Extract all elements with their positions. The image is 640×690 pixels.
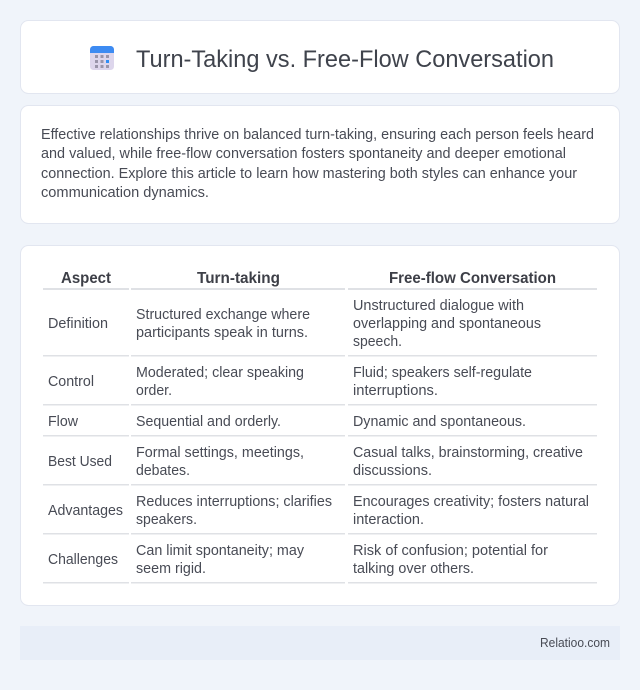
row: definition: Unstructured dialogue with [353, 298, 524, 314]
row: control: order. [136, 383, 172, 399]
row: definition [48, 298, 541, 350]
row: best used: Casual talks, brainstorming, creative [353, 445, 583, 461]
row: flow: Flow [48, 414, 79, 430]
table header row [61, 270, 556, 287]
panel: introduction [20, 106, 620, 224]
row: best used: debates. [136, 463, 190, 479]
intro text: connection. Explore this article to learn how mastering both styles can enhance your [41, 166, 577, 182]
row: challenges: Risk of confusion; potential for [353, 543, 548, 559]
row: definition: participants speak in turns. [136, 325, 308, 341]
table header row: Free-flow Conversation [389, 270, 556, 287]
row: advantages: Advantages [48, 503, 123, 519]
panel: title [20, 20, 620, 94]
footer [20, 626, 620, 660]
row: control: Fluid; speakers self-regulate [353, 365, 532, 381]
row: best used [48, 445, 583, 479]
row: control: Moderated; clear speaking [136, 365, 304, 381]
row: best used: Formal settings, meetings, [136, 445, 304, 461]
row: flow [48, 414, 526, 430]
table header row: Aspect [61, 270, 111, 287]
row: flow: Sequential and orderly. [136, 414, 281, 430]
row: definition: Definition [48, 316, 108, 332]
intro text [41, 127, 594, 201]
icon: calendar [90, 46, 114, 70]
table header row: Turn-taking [197, 270, 280, 287]
row: challenges: talking over others. [353, 561, 474, 577]
row: advantages [48, 494, 589, 528]
row: best used: Best Used [48, 454, 112, 470]
row: advantages: Reduces interruptions; clarifies [136, 494, 332, 510]
row: advantages: Encourages creativity; fosters natural [353, 494, 589, 510]
intro text: and valued, while free-flow conversation fosters spontaneity and deeper emotional [41, 146, 566, 162]
intro text: communication dynamics. [41, 185, 209, 201]
row: advantages: interaction. [353, 512, 424, 528]
row: advantages: speakers. [136, 512, 197, 528]
footer: Relatioo.com [540, 635, 610, 650]
row: challenges: seem rigid. [136, 561, 206, 577]
row: best used: discussions. [353, 463, 432, 479]
row: definition: Structured exchange where [136, 307, 310, 323]
row: control [48, 365, 532, 399]
intro text: Effective relationships thrive on balanced turn-taking, ensuring each person feels heard [41, 127, 594, 143]
row: control: Control [48, 374, 94, 390]
row: challenges [48, 543, 548, 577]
row: flow: Dynamic and spontaneous. [353, 414, 526, 430]
row: challenges: Challenges [48, 552, 118, 568]
panel: comparison table [20, 246, 620, 606]
row: control: interruptions. [353, 383, 438, 399]
row: definition: speech. [353, 334, 402, 350]
row: definition: overlapping and spontaneous [353, 316, 541, 332]
row: challenges: Can limit spontaneity; may [136, 543, 305, 559]
title text: Turn-Taking vs. Free-Flow Conversation [136, 46, 554, 73]
